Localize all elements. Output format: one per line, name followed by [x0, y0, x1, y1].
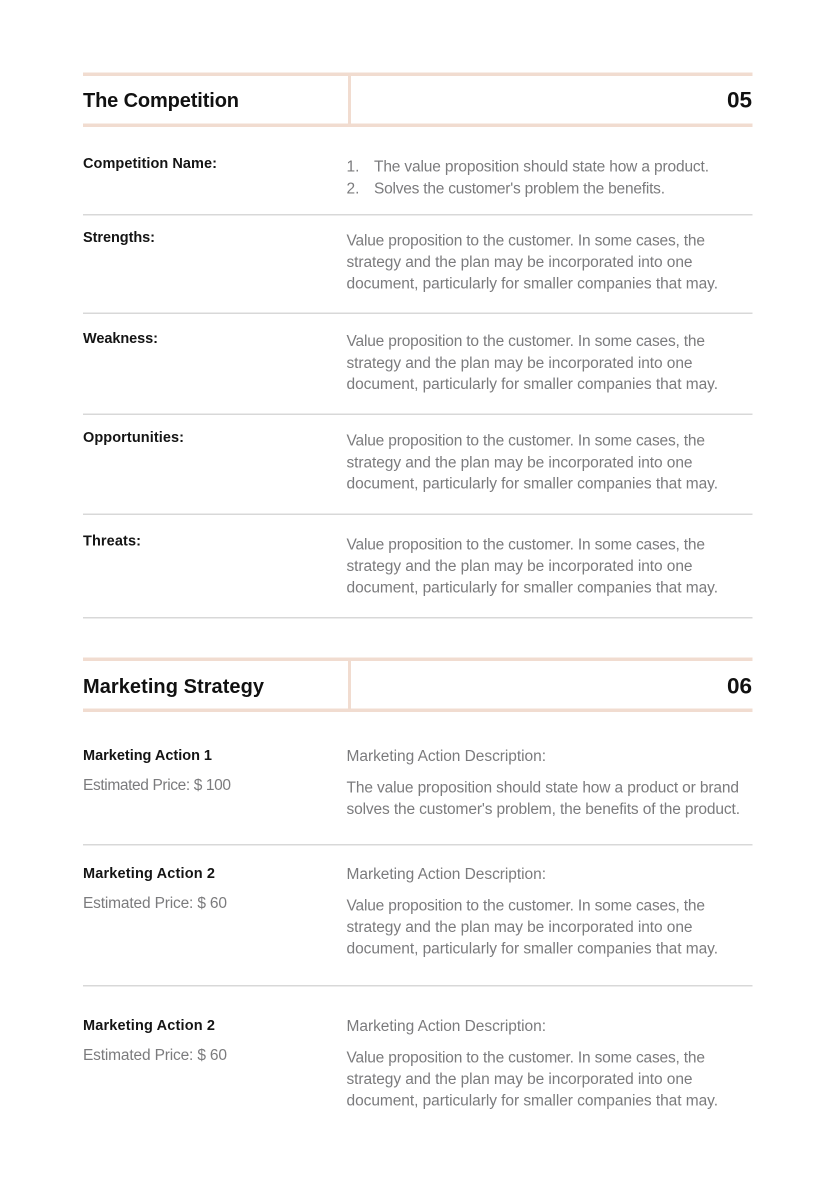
- row: Competition Name: Solves the customer's problem the benefits.: [374, 180, 665, 198]
- row: Marketing Action 2: Marketing Action 2: [83, 866, 215, 882]
- row: Strengths: document, particularly for smaller companies that may.: [346, 276, 718, 292]
- row: Opportunities: Value proposition to the customer. In some cases, the: [346, 432, 705, 450]
- page number 06: 06: [727, 674, 752, 698]
- header: Marketing Strategy: [83, 658, 752, 712]
- row: Weakness: Value proposition to the customer. In some cases, the: [346, 333, 705, 350]
- row: Opportunities: strategy and the plan may be incorporated into one: [346, 454, 692, 472]
- row: Opportunities: [83, 430, 718, 492]
- row: Weakness: strategy and the plan may be incorporated into one: [346, 355, 692, 372]
- row: Threats: Threats:: [83, 534, 141, 550]
- row: Marketing Action 2 (second): strategy and the plan may be incorporated into one: [346, 1071, 692, 1088]
- row: Marketing Action 2 (second): Marketing Action 2: [83, 1018, 215, 1034]
- row: Opportunities: document, particularly for smaller companies that may.: [346, 476, 718, 492]
- row: Threats: [83, 534, 718, 596]
- row: Threats: Value proposition to the customer. In some cases, the: [346, 536, 705, 554]
- row: Marketing Action 1: Marketing Action Description:: [346, 748, 546, 765]
- row: Marketing Action 2: document, particularly for smaller companies that may.: [346, 940, 718, 958]
- row: Marketing Action 2: Marketing Action Description:: [346, 866, 546, 883]
- row: Competition Name: 1.: [346, 158, 359, 176]
- row: Opportunities: Opportunities:: [83, 430, 184, 446]
- row: Marketing Action 2 (second): document, particularly for smaller companies that may.: [346, 1092, 718, 1110]
- row: Competition Name: 2.: [346, 180, 359, 198]
- heading: The Competition: The Competition: [83, 90, 239, 112]
- page number 05: 05: [727, 88, 752, 112]
- row: Marketing Action 2 (second): Estimated Price: $ 60: [83, 1047, 227, 1064]
- row: Marketing Action 1: Estimated Price: $ 100: [83, 777, 231, 794]
- header: The Competition: [83, 72, 752, 127]
- row: Competition Name: Competition Name:: [83, 156, 217, 172]
- row: Threats: document, particularly for smaller companies that may.: [346, 580, 718, 596]
- row: Marketing Action 1: The value proposition should state how a product or brand: [346, 780, 739, 796]
- row: Competition Name: The value proposition should state how a product.: [374, 158, 709, 176]
- row: Marketing Action 1: solves the customer's problem, the benefits of the product.: [346, 801, 740, 818]
- heading: Marketing Strategy: Marketing Strategy: [83, 676, 265, 698]
- row: Marketing Action 2: Value proposition to the customer. In some cases, the: [346, 898, 705, 914]
- row: Strengths: Strengths:: [83, 230, 155, 246]
- row: Marketing Action 2 (second): [83, 1018, 718, 1110]
- row: Weakness: document, particularly for smaller companies that may.: [346, 376, 718, 393]
- row: Marketing Action 2 (second): Value proposition to the customer. In some cases, the: [346, 1050, 705, 1066]
- row: Marketing Action 2: [83, 866, 718, 958]
- row: Marketing Action 1: Marketing Action 1: [83, 748, 212, 764]
- row: Strengths: strategy and the plan may be incorporated into one: [346, 254, 692, 271]
- row: Marketing Action 2: strategy and the plan may be incorporated into one: [346, 919, 692, 936]
- row: Marketing Action 2: Estimated Price: $ 60: [83, 895, 227, 912]
- row: Threats: strategy and the plan may be incorporated into one: [346, 558, 692, 575]
- row: Strengths: Value proposition to the customer. In some cases, the: [346, 232, 705, 250]
- row: Strengths: [83, 230, 718, 292]
- row: Weakness: [83, 331, 718, 393]
- row: Competition Name: [83, 156, 709, 198]
- row: Weakness: Weakness:: [83, 331, 158, 347]
- row: Marketing Action 1: [83, 748, 740, 818]
- row: Marketing Action 2 (second): Marketing Action Description:: [346, 1018, 546, 1035]
